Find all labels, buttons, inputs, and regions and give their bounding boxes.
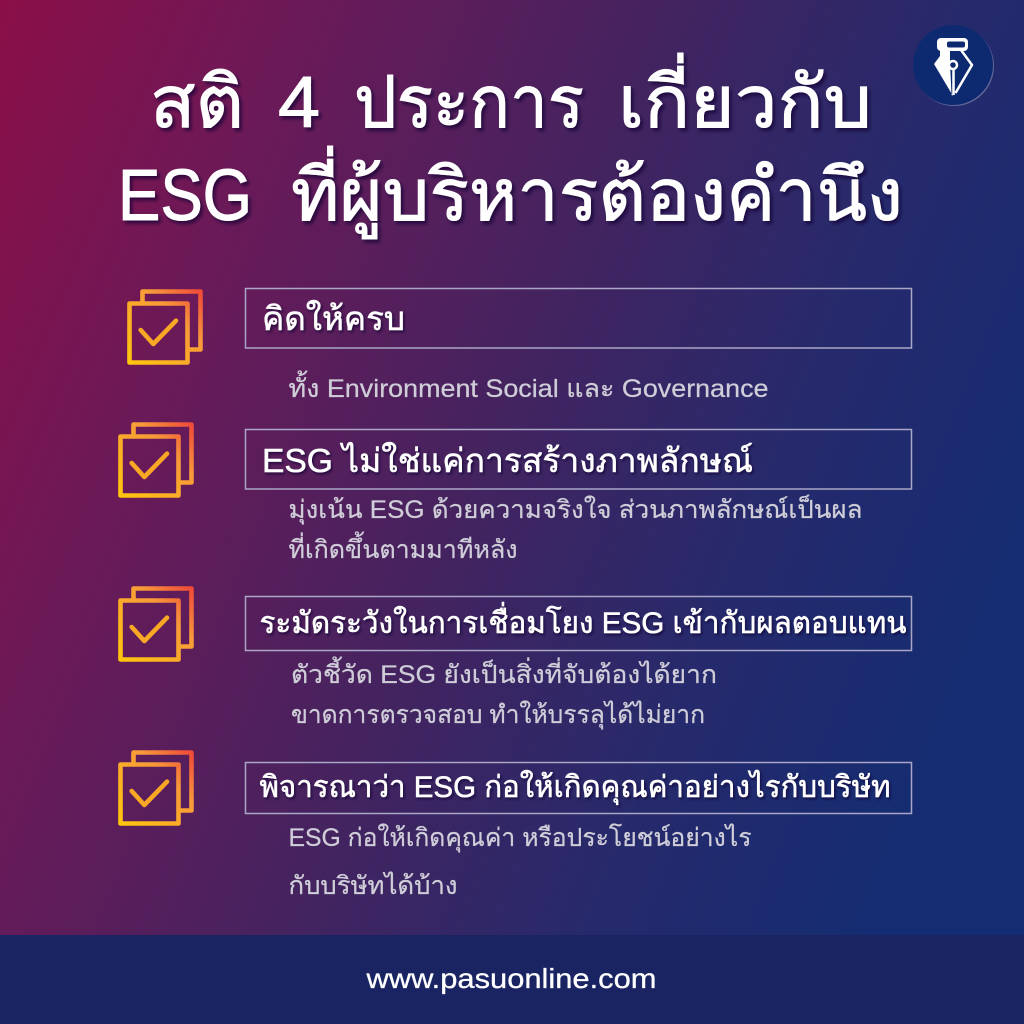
description — [288, 494, 862, 564]
title line 1: 4 — [278, 63, 320, 143]
title line 1 — [150, 53, 872, 143]
title line 1: เกี่ยวกับ — [618, 53, 872, 143]
item 4 — [120, 752, 912, 900]
item 2 — [120, 424, 912, 564]
footer bar — [0, 935, 1024, 1024]
description: ทั้ง Environment Social และ Governance — [288, 370, 768, 403]
icon: checked stacked boxes — [120, 752, 192, 824]
website url: www.pasuonline.com — [365, 963, 656, 994]
heading: พิจารณาว่า ESG ก่อให้เกิดคุณค่าอย่างไรกับบริษัท — [260, 769, 890, 806]
description: มุ่งเน้น ESG ด้วยความจริงใจ ส่วนภาพลักษณ์เป็นผล — [288, 494, 862, 525]
heading box — [246, 596, 912, 650]
title line 1: ประการ — [354, 63, 584, 143]
heading: ESG ไม่ใช่แค่การสร้างภาพลักษณ์ — [262, 442, 753, 479]
heading box — [246, 430, 912, 489]
logo: pen nib badge — [913, 25, 994, 106]
icon: checked stacked boxes — [120, 424, 192, 496]
item 3 — [120, 588, 912, 730]
description: ESG ก่อให้เกิดคุณค่า หรือประโยชน์อย่างไร — [288, 823, 752, 853]
description: ขาดการตรวจสอบ ทำให้บรรลุได้ไม่ยาก — [291, 700, 705, 730]
heading box — [246, 762, 912, 814]
heading: คิดให้ครบ — [262, 300, 405, 337]
title line 1: สติ — [150, 63, 244, 143]
title line 2: ที่ผู้บริหารต้องคำนึง — [291, 146, 903, 239]
description: กับบริษัทได้บ้าง — [288, 871, 458, 900]
heading box — [246, 288, 912, 348]
title line 2 — [118, 146, 903, 239]
description — [291, 656, 717, 730]
title line 2: ESG — [118, 156, 252, 236]
description: ที่เกิดขึ้นตามมาทีหลัง — [288, 531, 518, 564]
icon: checked stacked boxes — [130, 292, 200, 362]
icon: checked stacked boxes — [120, 588, 192, 660]
heading: ระมัดระวังในการเชื่อมโยง ESG เข้ากับผลตอบแทน — [260, 602, 906, 640]
item 1 — [130, 288, 912, 403]
description — [288, 823, 752, 900]
description: ตัวชี้วัด ESG ยังเป็นสิ่งที่จับต้องได้ยาก — [291, 656, 717, 689]
